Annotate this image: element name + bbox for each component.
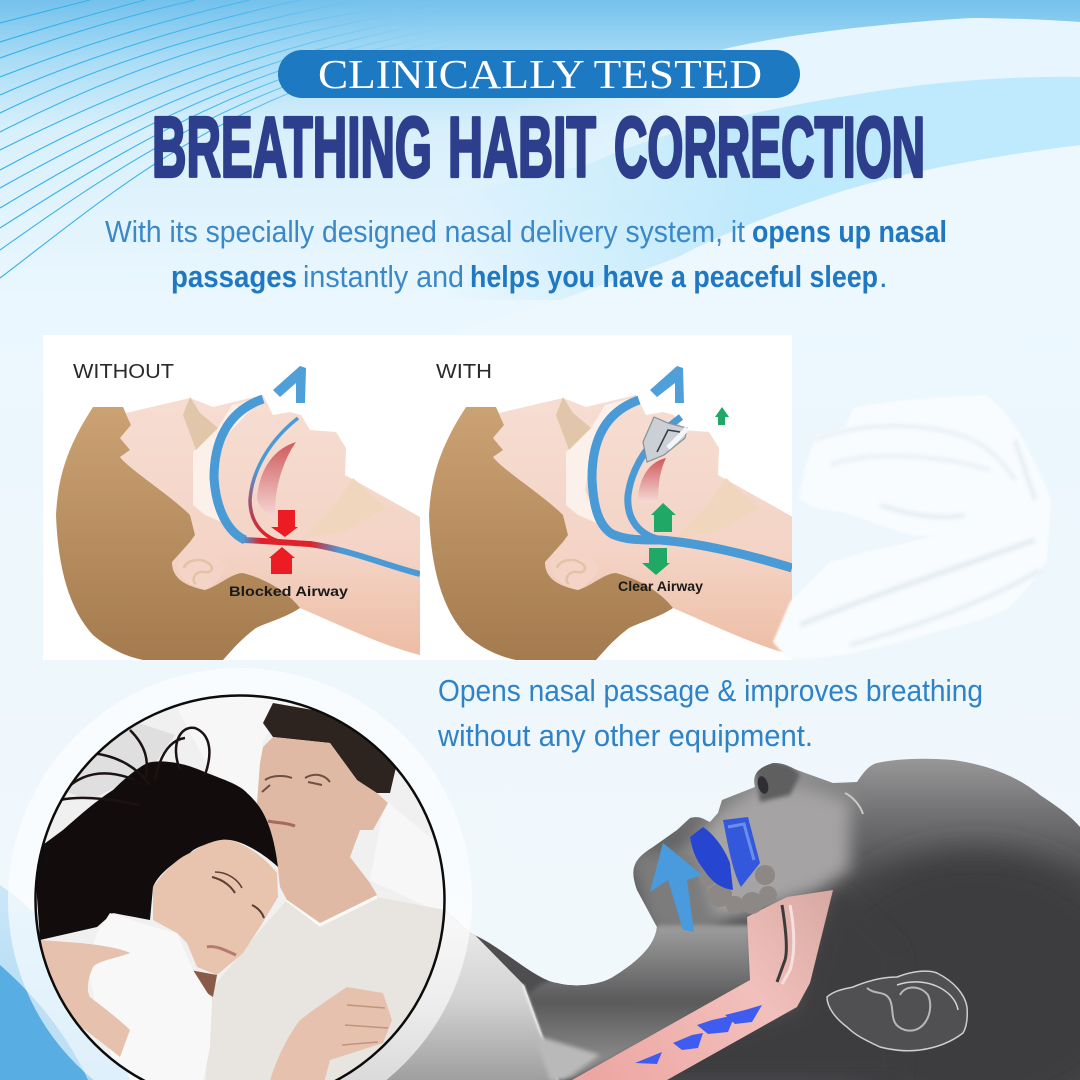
hair strands [60,728,209,805]
arrows: airway flow [635,1005,762,1064]
soft palate [257,442,296,520]
clear mouthguard [773,395,1051,658]
label: clear airway: Clear Airway [618,579,704,594]
man hair [263,703,397,793]
nostril [756,775,770,795]
diagram: with device [429,361,793,660]
panel: airway comparison [43,335,793,660]
badge: clinically tested: CLINICALLY TESTED [318,51,762,97]
photo halo [8,668,472,1080]
intro text: passages [171,259,297,294]
icon: blue mouthpiece [690,817,760,890]
man shirt [203,897,445,1080]
pillow [170,695,300,830]
intro text: helps you have a peaceful sleep [470,259,878,294]
intro text: . [879,259,888,294]
nasal device [643,417,687,462]
label: without: WITHOUT [73,361,174,383]
intro text: opens up nasal [752,214,947,249]
man features [262,775,330,826]
diagram: without device [56,361,420,660]
caption: without any other equipment. [437,719,813,753]
arrow: airflow [273,366,306,403]
title: HABIT [448,100,596,196]
intro text: instantly and [303,259,464,294]
head dark volume [854,838,1080,1080]
airway [572,890,833,1080]
intro text [105,214,947,294]
caption [437,674,983,753]
airway: clear [592,400,792,568]
title: BREATHING [152,100,432,196]
arrow: mouth airflow [650,843,702,932]
arrows: red obstruction [271,510,298,537]
woman face [153,840,278,975]
man left hand [40,940,130,1057]
intro text: With its specially designed nasal delivery system, it [105,214,745,249]
face shading [660,785,850,925]
neck shadow [193,970,217,997]
label: with: WITH [436,361,492,383]
label: blocked airway: Blocked Airway [229,583,348,599]
teeth [699,865,777,914]
arrows: green airway [642,407,729,575]
arrow: airflow [650,366,684,403]
woman hair [37,761,278,940]
blue wave bottom left [0,885,130,1080]
woman features [207,872,264,955]
closed eye [845,793,863,814]
man right hand [263,987,392,1080]
woman blouse [106,913,212,1062]
neck [520,925,752,1080]
airway: blocked [214,399,420,574]
title [152,100,925,196]
soft palate [638,458,666,503]
caption: Opens nasal passage & improves breathing [438,674,983,708]
photo: couple sleeping [30,690,450,1080]
ear [827,971,967,1051]
illustration: x-ray head side view [300,750,1080,1080]
man face [257,737,388,923]
decorative fine lines [0,0,460,278]
shoulder [340,910,558,1080]
